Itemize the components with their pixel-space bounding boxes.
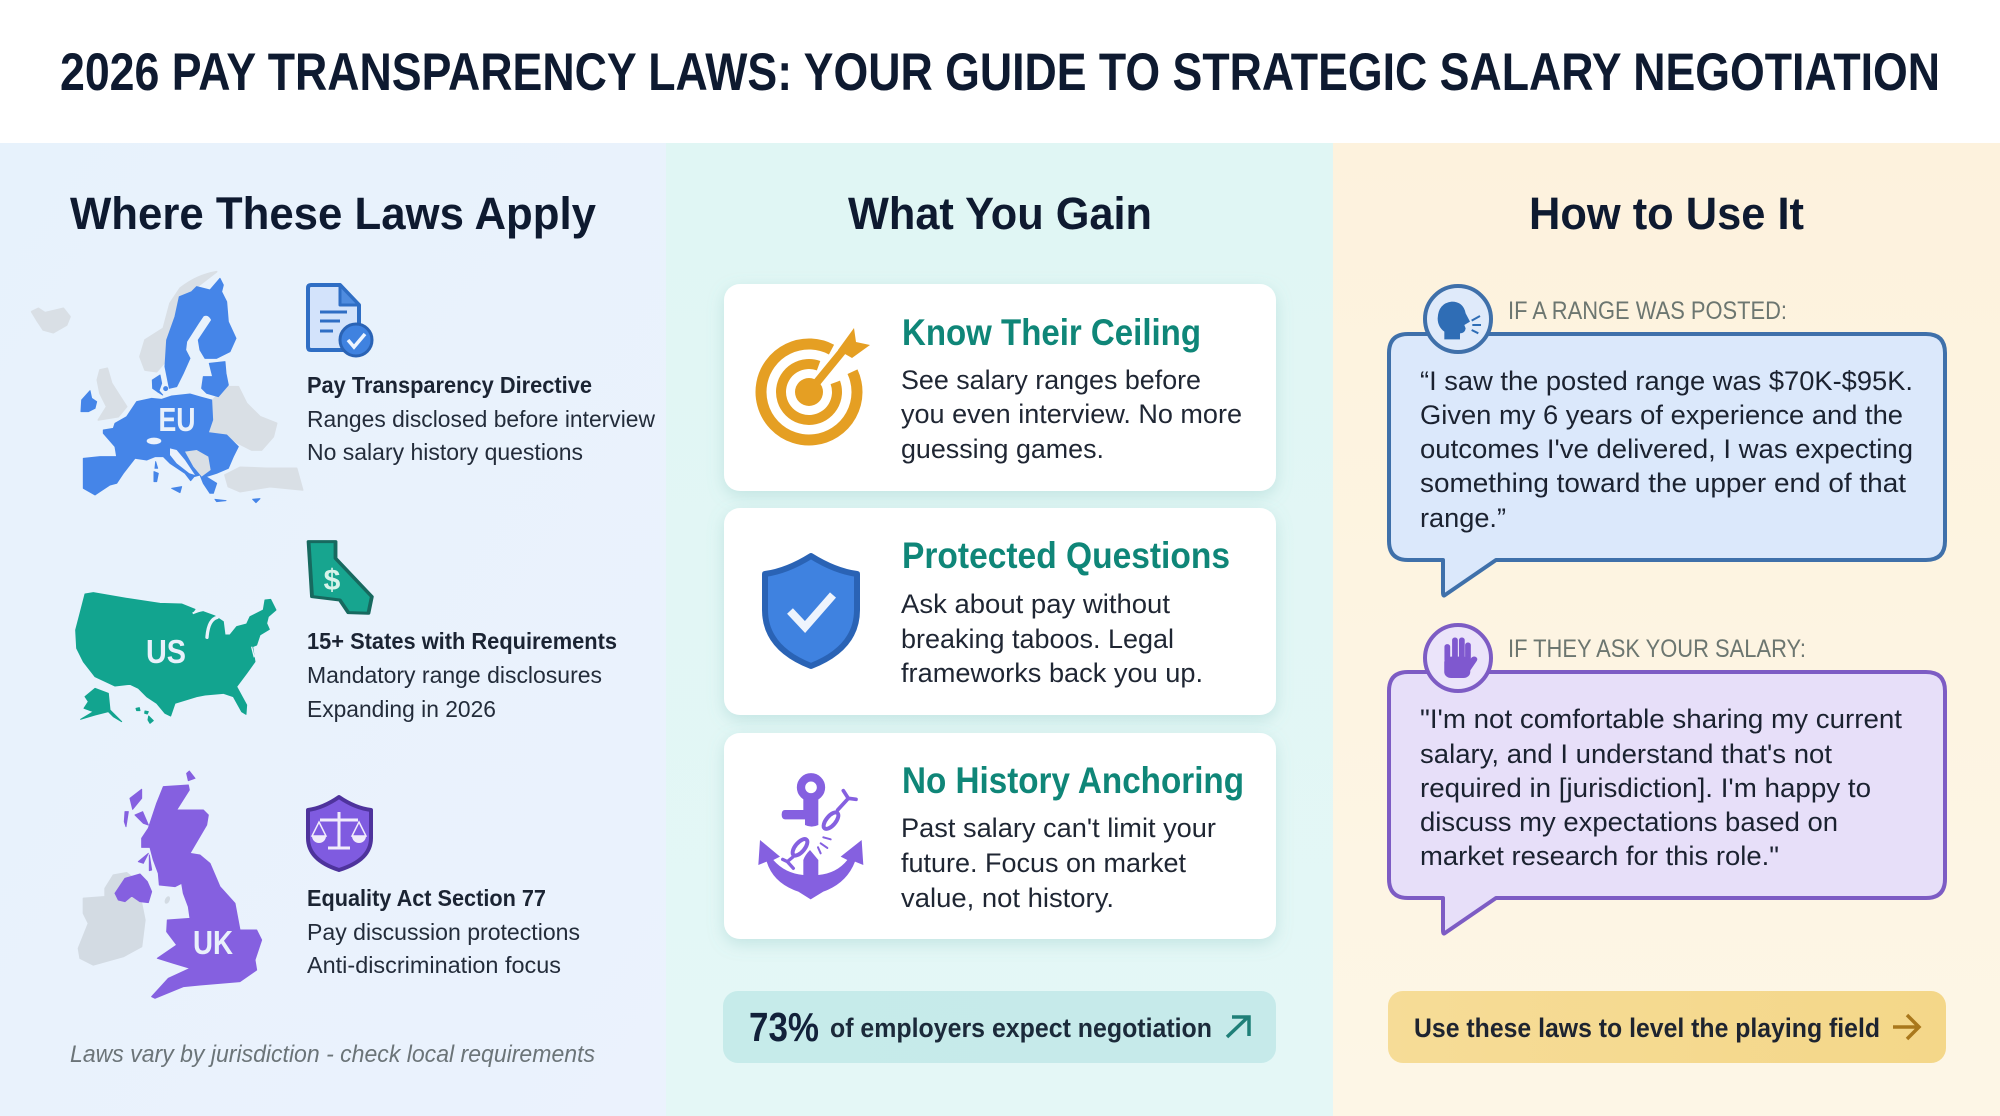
- quote: asked salary: discuss my expectations based on: [1420, 807, 1838, 837]
- card body: guessing games.: [901, 434, 1104, 464]
- text: UK equality act: [307, 885, 580, 978]
- speech bubble: asked salary: [1389, 625, 1945, 934]
- card title: No History Anchoring: [902, 760, 1244, 801]
- quote: asked salary: salary, and I understand that's not: [1420, 739, 1833, 769]
- callout: level the playing field: [1388, 991, 1946, 1063]
- card body: you even interview. No more: [901, 399, 1242, 429]
- header background: [0, 0, 2000, 143]
- card title: Know Their Ceiling: [902, 312, 1201, 353]
- panel: where these laws apply: [0, 143, 666, 1116]
- icon: raised hand: [1425, 625, 1491, 691]
- map: UK: [78, 771, 262, 998]
- quote: range posted: “I saw the posted range was $70K-$95K.: [1420, 366, 1913, 396]
- text: UK equality act: Pay discussion protections: [307, 919, 580, 945]
- text: UK equality act: Equality Act Section 77: [307, 885, 546, 911]
- label: asked salary: IF THEY ASK YOUR SALARY:: [1508, 635, 1806, 663]
- heading: what you gain: What You Gain: [848, 188, 1152, 239]
- quote: asked salary: market research for this role.": [1420, 841, 1779, 871]
- text: US states: Mandatory range disclosures: [307, 662, 602, 688]
- callout text: Use these laws to level the playing field: [1414, 1013, 1880, 1043]
- text: UK equality act: Anti-discrimination focus: [307, 952, 561, 978]
- icon: right arrow: [1893, 1015, 1919, 1039]
- icon: broken anchor: [758, 777, 863, 899]
- panel: how to use it: [1333, 143, 2000, 1116]
- stat callout: 73%: [723, 991, 1276, 1063]
- card title: Protected Questions: [902, 535, 1230, 576]
- card body: value, not history.: [901, 883, 1114, 913]
- map: EU: [32, 272, 303, 503]
- text: EU directive: Pay Transparency Directive: [307, 372, 592, 398]
- heading: where these laws apply: Where These Laws Apply: [70, 188, 596, 239]
- quote: range posted: something toward the upper end of that: [1420, 468, 1907, 498]
- card body: breaking taboos. Legal: [901, 624, 1174, 654]
- quote: asked salary: [1420, 704, 1903, 871]
- card body: [901, 813, 1216, 913]
- label: EU: EU: [158, 401, 196, 438]
- icon: up-right arrow: [1227, 1017, 1249, 1037]
- text: EU directive: No salary history questions: [307, 439, 583, 465]
- stat number: 73%: [749, 1004, 819, 1050]
- panel: what you gain: [666, 143, 1333, 1116]
- label: range posted: IF A RANGE WAS POSTED:: [1508, 297, 1787, 325]
- card body: [901, 365, 1242, 464]
- icon: document with check: [308, 285, 372, 356]
- card body: future. Focus on market: [901, 848, 1186, 878]
- speech bubble: range posted: [1389, 286, 1945, 596]
- footnote: Laws vary by jurisdiction - check local requirements: [70, 1041, 595, 1068]
- icon: scales shield: [308, 797, 371, 870]
- icon: California dollar: $: [324, 564, 341, 597]
- card body: [901, 589, 1203, 688]
- text: US states: Expanding in 2026: [307, 696, 496, 722]
- icon: speaking head: [1425, 286, 1491, 352]
- card: know their ceiling: [724, 284, 1276, 491]
- card body: frameworks back you up.: [901, 658, 1203, 688]
- text: EU directive: [307, 372, 656, 465]
- quote: range posted: outcomes I've delivered, I was expecting: [1420, 434, 1913, 464]
- text: US states: [307, 628, 617, 722]
- label: UK: UK: [193, 924, 233, 961]
- card body: Past salary can't limit your: [901, 813, 1216, 843]
- icon: shield check: [765, 556, 857, 666]
- text: US states: 15+ States with Requirements: [307, 628, 617, 654]
- card: no history anchoring: [724, 733, 1276, 939]
- quote: range posted: [1420, 366, 1913, 533]
- card: protected questions: [724, 508, 1276, 715]
- quote: range posted: Given my 6 years of experience and the: [1420, 400, 1903, 430]
- card body: See salary ranges before: [901, 365, 1201, 395]
- text: EU directive: Ranges disclosed before interview: [307, 406, 656, 432]
- quote: asked salary: required in [jurisdiction]. I'm happy to: [1420, 773, 1871, 803]
- stat text: of employers expect negotiation: [830, 1013, 1212, 1043]
- quote: range posted: range.”: [1420, 503, 1506, 533]
- card body: Ask about pay without: [901, 589, 1170, 619]
- label: US: US: [146, 633, 186, 670]
- quote: asked salary: "I'm not comfortable sharing my current: [1420, 704, 1903, 734]
- icon: target: [761, 328, 870, 440]
- heading: how to use it: How to Use It: [1529, 188, 1804, 239]
- icon: California dollar: [309, 542, 372, 613]
- map: US: [76, 593, 276, 723]
